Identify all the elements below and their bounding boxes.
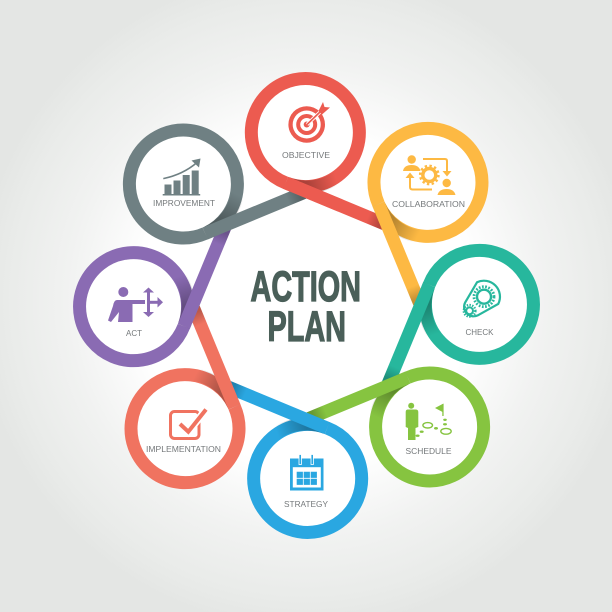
icon: collaboration <box>403 155 456 195</box>
title: PLAN <box>268 304 346 351</box>
title: ACTION <box>250 264 361 311</box>
ribbon: improvement <box>107 89 305 287</box>
panel: implementation <box>90 307 288 505</box>
panel: objective <box>251 79 386 224</box>
ribbon: schedule <box>308 324 506 522</box>
icon: target <box>288 102 330 143</box>
icon: checkbox <box>170 410 206 438</box>
label: objective: OBJECTIVE <box>282 151 330 160</box>
label: improvement: IMPROVEMENT <box>153 199 215 208</box>
icon: gears and belt <box>464 281 500 317</box>
panel: act <box>80 226 225 361</box>
icon: rising bar chart <box>163 158 200 196</box>
ribbon: check <box>388 250 533 385</box>
ribbon: objective tail overlap <box>286 183 340 205</box>
ribbon: objective <box>251 79 386 224</box>
panel: collaboration <box>325 106 523 304</box>
title <box>250 264 361 351</box>
label: implementation: IMPLEMENTATION <box>146 445 221 454</box>
icon: path to flag <box>406 403 451 440</box>
ribbon: implementation <box>90 307 288 505</box>
ribbon: strategy <box>227 387 362 532</box>
icon: person with arrows <box>108 287 163 322</box>
panel: improvement <box>107 89 305 287</box>
label: collaboration: COLLABORATION <box>392 200 465 209</box>
label: schedule: SCHEDULE <box>406 447 452 456</box>
label: check: CHECK <box>466 328 494 337</box>
ribbon: collaboration <box>325 106 523 304</box>
icon: calendar <box>290 454 324 490</box>
label: act: ACT <box>126 329 142 338</box>
panel: strategy <box>227 387 362 532</box>
ribbon: act <box>80 226 225 361</box>
label: strategy: STRATEGY <box>284 500 329 509</box>
panel: schedule <box>308 324 506 522</box>
panel: check <box>388 250 533 385</box>
